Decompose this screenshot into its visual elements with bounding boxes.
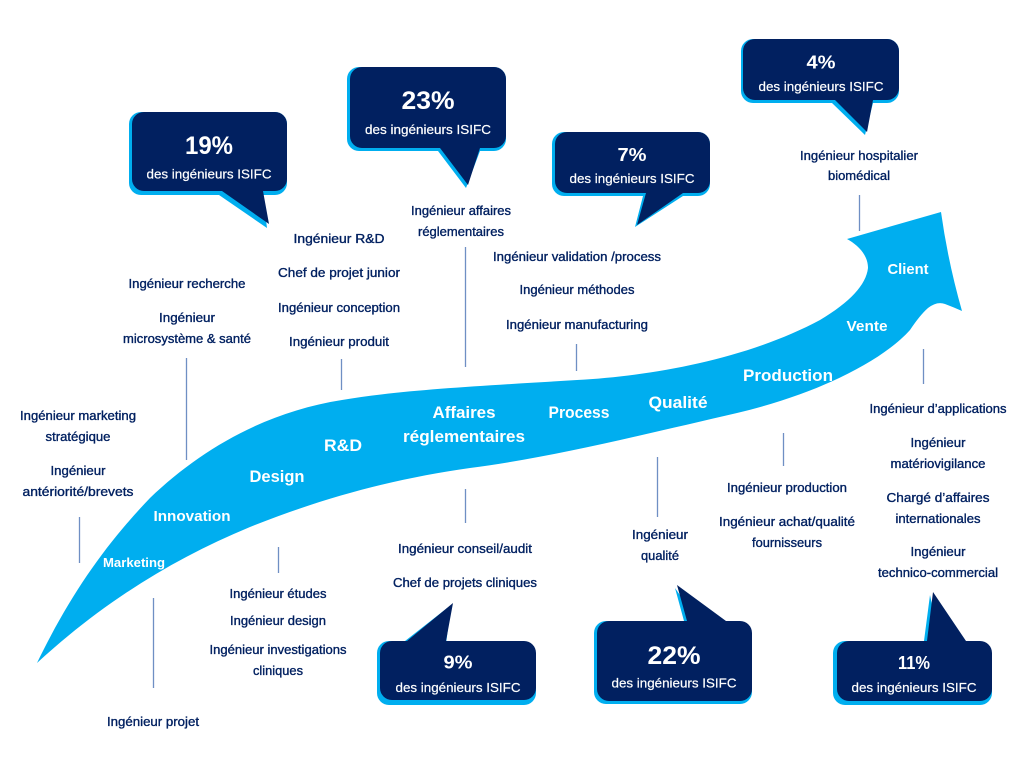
job titles: Process: Ingénieur méthodes — [520, 282, 635, 297]
job titles: Client: biomédical — [828, 168, 890, 183]
job titles: Qualité: Ingénieur — [632, 527, 689, 542]
callout: 23% — [347, 67, 506, 188]
callout: 4%: des ingénieurs ISIFC — [758, 79, 884, 94]
callout: 11% — [833, 592, 992, 705]
job titles: R&D: Ingénieur conception — [278, 300, 400, 315]
job titles: Innovation: microsystème & santé — [123, 331, 251, 346]
callout: 23%: des ingénieurs ISIFC — [365, 122, 491, 137]
callout: 4% — [741, 39, 899, 135]
job title: Ingénieur projet: Ingénieur projet — [107, 714, 199, 729]
job titles: Vente: matériovigilance — [890, 456, 986, 471]
callout: 22%: des ingénieurs ISIFC — [612, 676, 736, 690]
callout: 9%: des ingénieurs ISIFC — [396, 680, 520, 695]
job titles: Design: Ingénieur design — [230, 613, 326, 628]
job titles: Vente: technico-commercial — [878, 565, 998, 580]
job titles: Vente: internationales — [896, 511, 981, 526]
job titles: Affaires réglementaires: Ingénieur affaires — [411, 203, 511, 218]
callout: 7%: 7% — [618, 145, 646, 165]
callout: 19%: 19% — [185, 132, 233, 160]
job titles: R&D: Ingénieur R&D — [294, 231, 384, 246]
callout: 9% — [377, 603, 536, 705]
job titles: Marketing: antériorité/brevets — [22, 484, 134, 499]
job titles: R&D: Chef de projet junior — [278, 265, 401, 280]
job titles: R&D — [278, 231, 401, 349]
job titles: Affaires réglementaires lower: Ingénieur conseil/audit — [398, 541, 532, 556]
arrow stage labels: Production — [743, 366, 833, 385]
arrow stage labels: Affaires — [432, 403, 496, 422]
callout: 11%: 11% — [898, 653, 930, 673]
job titles: Design: Ingénieur études — [230, 586, 327, 601]
job titles: Vente: Ingénieur — [910, 544, 966, 559]
callout: 11%: des ingénieurs ISIFC — [852, 680, 976, 695]
job titles: Process: Ingénieur validation /process — [493, 249, 661, 264]
callout: 7%: des ingénieurs ISIFC — [570, 171, 694, 186]
job titles: Vente: Chargé d’affaires — [886, 490, 990, 505]
job titles: Production — [719, 480, 855, 550]
job titles: Vente — [870, 401, 1007, 580]
callout: 7% — [552, 132, 710, 227]
arrow stage labels: Innovation — [154, 508, 230, 525]
job titles: Qualité — [632, 527, 689, 563]
arrow stage labels: Client — [888, 261, 929, 278]
arrow stage labels: Process — [548, 403, 610, 422]
job titles: Affaires réglementaires lower — [393, 541, 538, 590]
job titles: Marketing — [20, 408, 136, 499]
arrow stage labels — [103, 261, 929, 570]
job titles: Affaires réglementaires lower: Chef de projets cliniques — [393, 575, 538, 590]
arrow stage labels: Qualité — [648, 393, 708, 412]
arrow stage labels: R&D — [324, 436, 362, 455]
job titles: Client: Ingénieur hospitalier — [800, 148, 919, 163]
connector lines — [80, 195, 924, 688]
job titles: Process — [493, 249, 661, 332]
job titles: R&D: Ingénieur produit — [289, 334, 389, 349]
job titles: Vente: Ingénieur d’applications — [870, 401, 1007, 416]
job titles: Innovation — [123, 276, 251, 346]
job titles: Qualité: qualité — [641, 548, 679, 563]
callout: 19% — [129, 112, 287, 228]
job titles: Innovation: Ingénieur recherche — [128, 276, 246, 291]
job titles: Design: cliniques — [253, 663, 303, 678]
job titles: Process: Ingénieur manufacturing — [506, 317, 648, 332]
job titles: Affaires réglementaires — [411, 203, 511, 239]
callout: 22% — [594, 585, 752, 704]
callout: 4%: 4% — [806, 52, 836, 72]
callout: 9%: 9% — [444, 652, 472, 672]
job titles: Design — [210, 586, 347, 678]
arrow: career path curve — [37, 212, 962, 663]
job titles: Production: fournisseurs — [752, 535, 822, 550]
job titles: Marketing: Ingénieur — [50, 463, 106, 478]
callout: 23%: 23% — [402, 87, 454, 115]
job titles: Client — [800, 148, 919, 183]
job titles: Production: Ingénieur achat/qualité — [719, 514, 855, 529]
arrow stage labels: Marketing — [103, 555, 165, 570]
job titles: Vente: Ingénieur — [910, 435, 966, 450]
job titles: Production: Ingénieur production — [727, 480, 847, 495]
job titles: Marketing: Ingénieur marketing — [20, 408, 136, 423]
arrow stage labels: Vente — [846, 318, 888, 335]
arrow stage labels: Design — [250, 467, 304, 486]
callout: 19%: des ingénieurs ISIFC — [146, 166, 272, 182]
job titles: Innovation: Ingénieur — [159, 310, 216, 325]
job titles: Affaires réglementaires: réglementaires — [418, 224, 504, 239]
job titles: Design: Ingénieur investigations — [210, 642, 347, 657]
callout: 22%: 22% — [648, 642, 700, 670]
job titles: Marketing: stratégique — [46, 429, 110, 444]
arrow stage labels: réglementaires — [403, 427, 525, 446]
